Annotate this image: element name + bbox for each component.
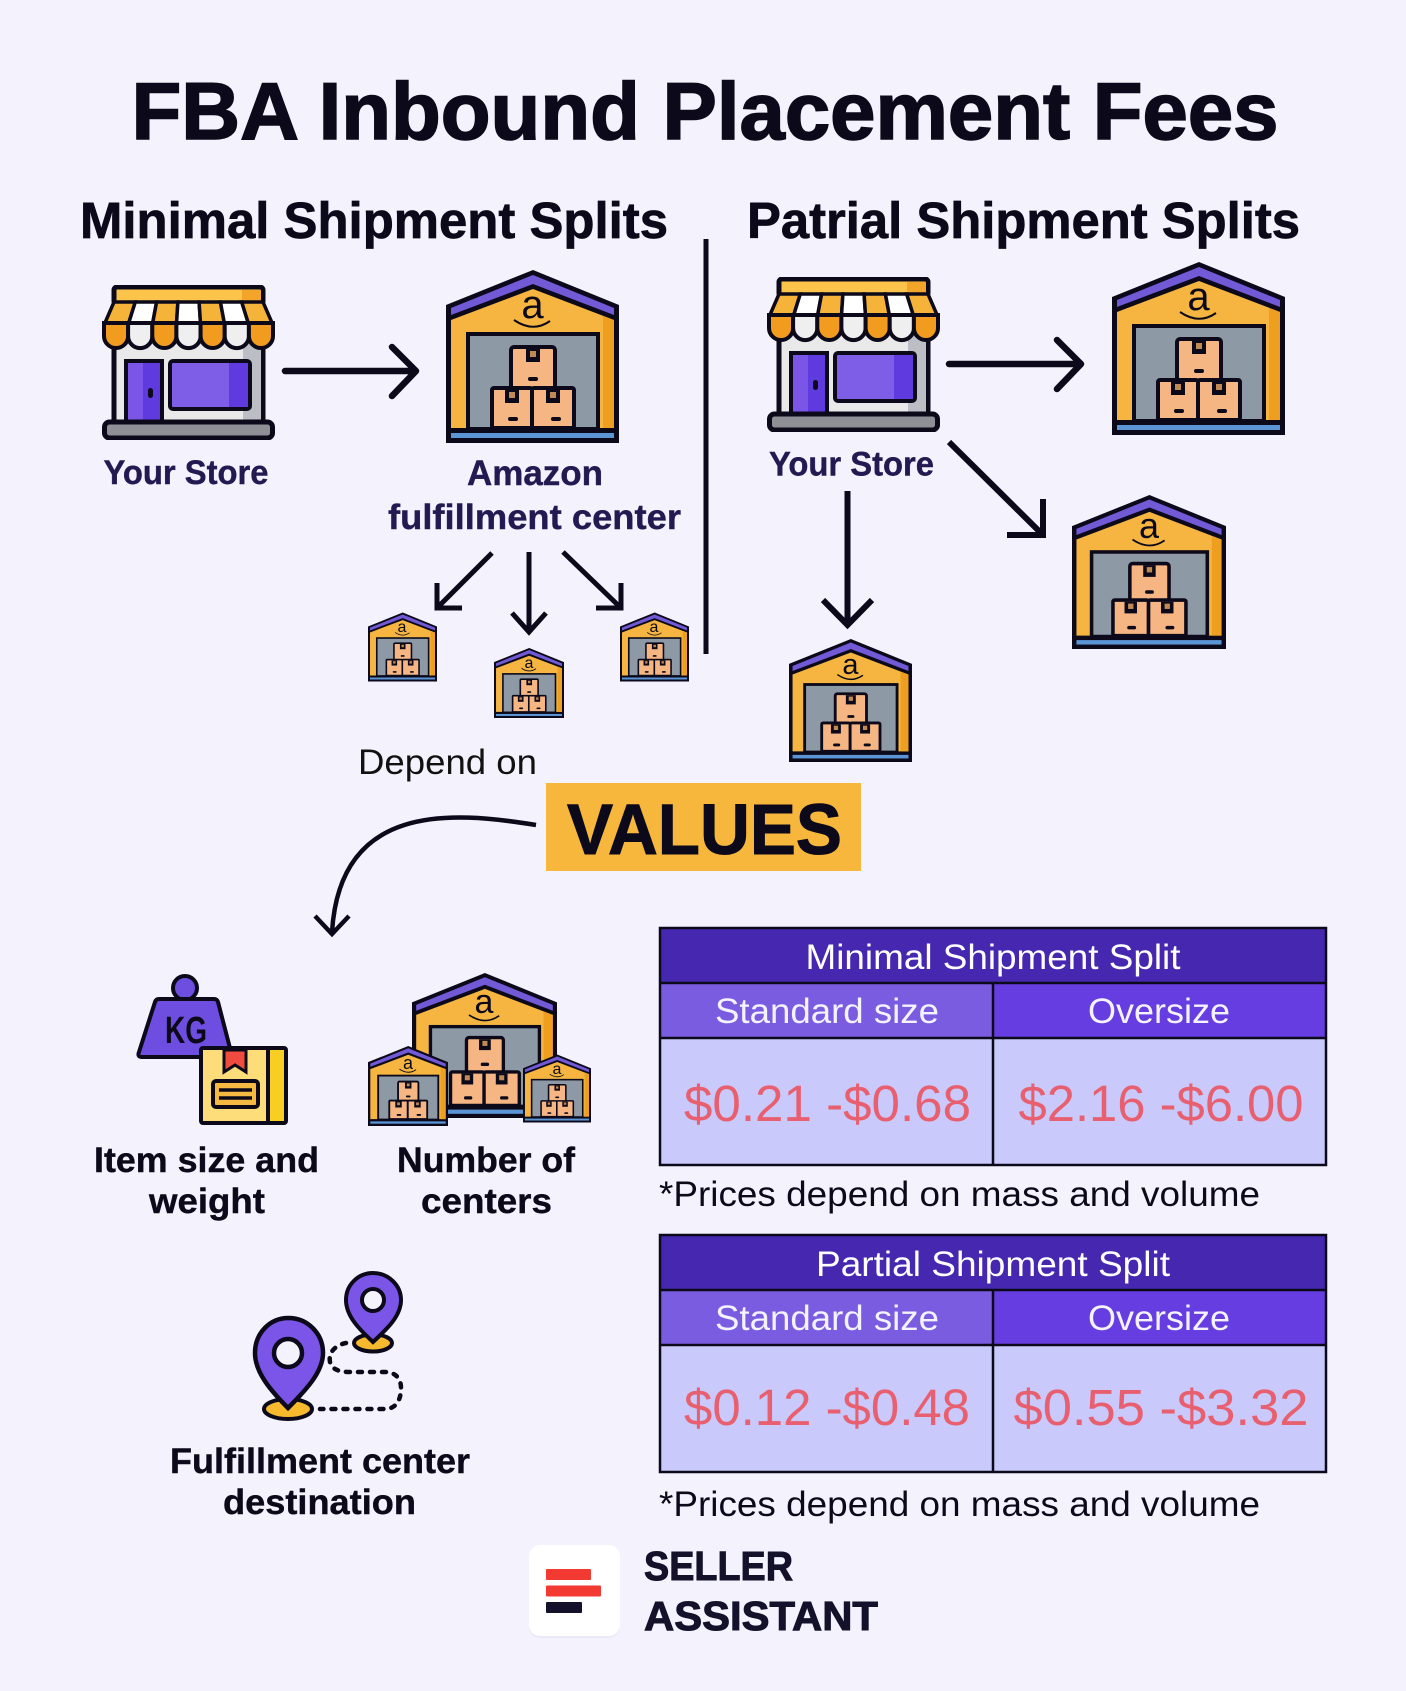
icon: multiple warehouses: a [475, 983, 494, 1021]
icon: multiple warehouses: a [553, 1061, 562, 1078]
label: fulfillment center destination: Fulfillment center [170, 1442, 470, 1481]
panel: partial shipment splits [747, 192, 1300, 762]
table: minimal shipment split: Minimal Shipment Split [806, 938, 1181, 977]
icon: warehouse top: a [1187, 275, 1210, 319]
arrow: down right [563, 552, 621, 608]
icon: small warehouse left: a [398, 619, 407, 636]
heading: minimal shipment splits: Minimal Shipment Splits [80, 192, 668, 249]
label: item size and weight: Item size and [94, 1141, 319, 1180]
arrow: store to fulfillment center [285, 347, 416, 396]
icon: warehouse top [1112, 262, 1285, 435]
table: partial shipment split: Oversize [1088, 1299, 1230, 1338]
icon: amazon warehouse: a [521, 283, 544, 327]
icon: location pins [255, 1273, 401, 1419]
table: minimal shipment split [660, 928, 1326, 1165]
icon: store [104, 287, 273, 438]
arrow: to warehouse right [949, 340, 1081, 389]
label: your store: Your Store [104, 454, 268, 492]
table: minimal shipment split: $0.21 -$0.68 [684, 1075, 971, 1132]
callout: values: VALUES [567, 791, 842, 870]
table: minimal shipment split: Oversize [1088, 992, 1230, 1031]
icon: small warehouse center: a [525, 655, 534, 672]
icon: warehouse bottom [789, 639, 912, 762]
table: minimal shipment split: $2.16 -$6.00 [1018, 1075, 1304, 1132]
arrow: down [823, 491, 872, 625]
arrow: down [512, 552, 546, 632]
label: item size and weight: weight [148, 1182, 265, 1221]
panel: minimal shipment splits [80, 192, 689, 718]
icon: small warehouse center [494, 648, 564, 718]
icon: small warehouse left [368, 612, 437, 682]
logo: seller assistant [529, 1543, 878, 1639]
icon: warehouse bottom: a [842, 649, 859, 681]
icon: small warehouse right [620, 612, 689, 682]
logo: seller assistant: ASSISTANT [644, 1593, 878, 1639]
label: amazon fulfillment center: Amazon [467, 454, 603, 493]
icon: warehouse middle [1072, 495, 1226, 649]
heading: patrial shipment splits: Patrial Shipment Splits [747, 192, 1300, 249]
icon: small warehouse right: a [650, 619, 659, 636]
arrow: down left [437, 553, 492, 608]
text: depend on: Depend on [358, 743, 537, 782]
arrow: diagonal [949, 442, 1043, 535]
icon: weight and box [138, 976, 286, 1123]
label: number of centers: Number of [397, 1141, 575, 1180]
label: number of centers: centers [421, 1182, 552, 1221]
logo: seller assistant: SELLER [644, 1543, 793, 1589]
icon: store [769, 279, 938, 430]
icon: warehouse middle: a [1139, 505, 1160, 546]
table: partial shipment split: Standard size [715, 1299, 939, 1338]
table: partial shipment split: Partial Shipment Split [816, 1245, 1170, 1284]
note: prices depend: *Prices depend on mass and volume [659, 1175, 1260, 1214]
label: fulfillment center destination [170, 1442, 470, 1522]
title: FBA Inbound Placement Fees [132, 67, 1278, 157]
icon: multiple warehouses: a [403, 1053, 414, 1073]
icon: weight and box: KG [165, 1010, 207, 1052]
note: prices depend: *Prices depend on mass and volume [659, 1485, 1260, 1524]
table: minimal shipment split: Standard size [715, 992, 939, 1031]
arrow: curved from values [315, 818, 536, 934]
label: amazon fulfillment center [388, 454, 681, 537]
table: partial shipment split [660, 1235, 1326, 1472]
icon: multiple warehouses [368, 973, 591, 1126]
label: item size and weight [94, 1141, 319, 1221]
icon: amazon warehouse [446, 270, 619, 443]
label: amazon fulfillment center: fulfillment center [388, 498, 681, 537]
label: number of centers [397, 1141, 575, 1221]
table: partial shipment split: $0.55 -$3.32 [1014, 1379, 1308, 1436]
label: fulfillment center destination: destination [223, 1483, 416, 1522]
table: partial shipment split: $0.12 -$0.48 [684, 1379, 970, 1436]
label: your store: Your Store [769, 446, 934, 484]
divider [704, 239, 708, 654]
